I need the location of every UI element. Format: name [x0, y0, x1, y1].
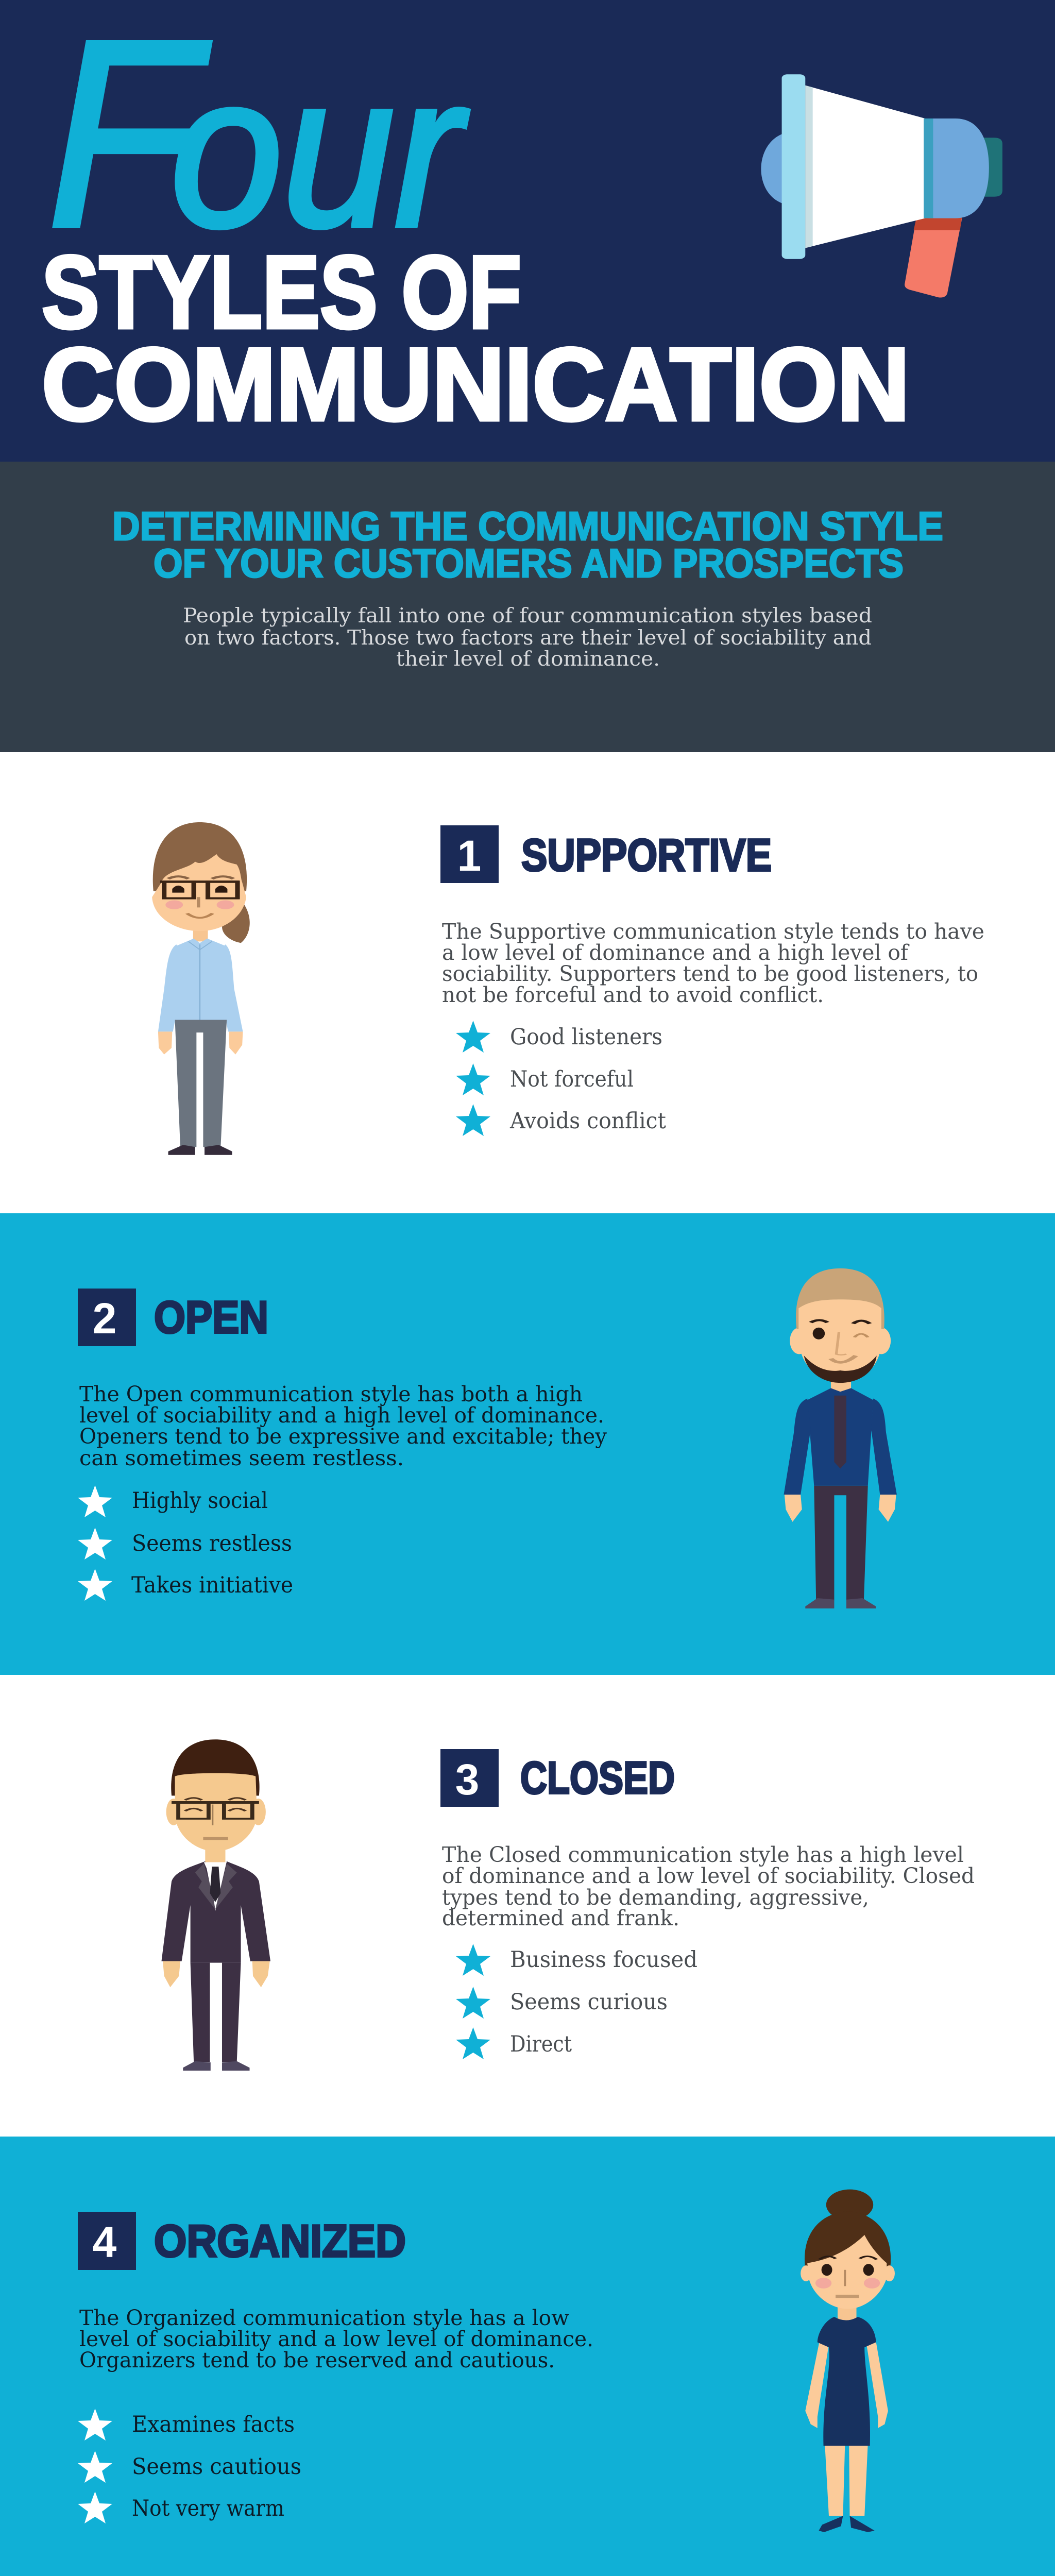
figure: organized woman	[801, 2190, 895, 2532]
bullet list	[78, 2409, 301, 2523]
heading: determining the style	[112, 503, 943, 586]
description: not be forceful and to avoid conflict.	[442, 982, 824, 1007]
number badge 1	[440, 825, 499, 883]
bullet list: Takes initiative	[131, 1572, 293, 1598]
description: determined and frank.	[442, 1906, 679, 1930]
description: sociability. Supporters tend to be good listeners, to	[442, 961, 978, 986]
description: Organizers tend to be reserved and cautious.	[79, 2348, 555, 2372]
bullet list: Seems cautious	[132, 2454, 301, 2480]
bullet list: Highly social	[132, 1488, 268, 1514]
description: The Closed communication style has a high level	[442, 1842, 964, 1867]
description: level of sociability and a high level of dominance.	[79, 1403, 604, 1428]
number badge 3	[440, 1749, 499, 1807]
description	[79, 2306, 593, 2372]
bullet list: Seems restless	[132, 1531, 292, 1556]
number badge 4: 4	[93, 2218, 117, 2266]
description: a low level of dominance and a high level of	[442, 940, 910, 965]
panel: header	[0, 0, 1055, 462]
bullet list	[456, 1021, 666, 1136]
bullet list	[456, 1944, 697, 2059]
description	[442, 1842, 975, 1930]
heading: open: OPEN	[154, 1292, 268, 1343]
bullet list: Business focused	[510, 1947, 697, 1973]
heading: organized: ORGANIZED	[154, 2215, 406, 2266]
bullet list: Examines facts	[132, 2412, 295, 2437]
description	[79, 1382, 607, 1470]
description: types tend to be demanding, aggressive,	[442, 1885, 869, 1910]
panel: organized	[0, 2137, 1055, 2576]
description: Openers tend to be expressive and excitable; they	[79, 1424, 607, 1449]
bullet list: Direct	[510, 2031, 572, 2057]
description: can sometimes seem restless.	[79, 1446, 404, 1470]
figure: closed man	[161, 1739, 270, 2071]
description: level of sociability and a low level of dominance.	[79, 2327, 593, 2351]
intro paragraph: on two factors. Those two factors are their level of sociability and	[184, 626, 872, 650]
intro paragraph: their level of dominance.	[396, 648, 660, 671]
number badge 4	[78, 2212, 136, 2270]
bullet list: Not forceful	[510, 1066, 634, 1092]
number badge 2: 2	[93, 1294, 116, 1343]
panel: open	[0, 1213, 1055, 1675]
panel: supportive	[152, 822, 984, 1155]
bullet list: Seems curious	[510, 1989, 668, 2015]
bullet list: Good listeners	[510, 1024, 662, 1050]
intro paragraph: People typically fall into one of four communication styles based	[183, 604, 872, 628]
icon: megaphone	[761, 74, 1002, 298]
description: of dominance and a low level of sociability. Closed	[442, 1863, 975, 1888]
bullet list: Not very warm	[132, 2496, 284, 2521]
heading: determining the style: DETERMINING THE COMMUNICATION STYLE	[112, 503, 943, 549]
figure: open man	[784, 1268, 897, 1608]
description	[442, 919, 984, 1007]
heading: supportive: SUPPORTIVE	[521, 829, 772, 880]
figure: supportive woman	[152, 822, 250, 1155]
description: The Open communication style has both a high	[79, 1382, 583, 1406]
title line: Communication: COMMUNICATION	[42, 327, 910, 442]
bullet list: Avoids conflict	[509, 1108, 666, 1134]
bullet list	[78, 1485, 293, 1601]
number badge 3: 3	[455, 1755, 479, 1804]
panel: intro	[0, 462, 1055, 752]
number badge 2	[78, 1289, 136, 1346]
heading: closed: CLOSED	[520, 1752, 675, 1803]
description: The Supportive communication style tends to have	[442, 919, 984, 944]
panel: closed	[161, 1739, 975, 2071]
intro paragraph	[183, 604, 872, 671]
title line: Styles of: STYLES OF	[42, 235, 521, 350]
number badge 1: 1	[457, 832, 481, 880]
description: The Organized communication style has a low	[79, 2306, 569, 2330]
heading: determining the style: OF YOUR CUSTOMERS AND PROSPECTS	[154, 540, 904, 586]
